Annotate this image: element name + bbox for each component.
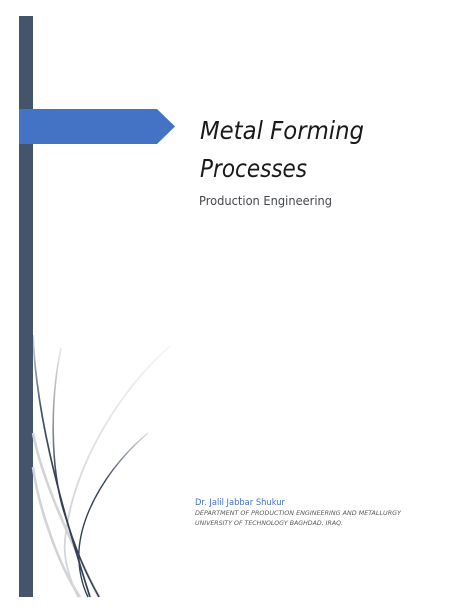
curve: dark left sweep xyxy=(33,335,90,597)
curve: grey thin sweep xyxy=(53,348,99,597)
left vertical bar xyxy=(19,16,33,597)
curve: light lower left xyxy=(33,467,80,597)
title line 2: Processes xyxy=(200,154,307,183)
curve: light long sweep xyxy=(65,346,170,597)
blue pentagon arrow xyxy=(19,109,175,144)
university line: UNIVERSITY OF TECHNOLOGY BAGHDAD, IRAQ. xyxy=(195,519,343,527)
department line: DEPARTMENT OF PRODUCTION ENGINEERING AND METALLURGY xyxy=(195,509,402,517)
author name: Dr. Jalil Jabbar Shukur xyxy=(195,498,285,508)
curve: light middle left xyxy=(33,433,99,597)
subtitle: Production Engineering xyxy=(199,193,332,208)
decorative curves xyxy=(33,335,170,597)
curve: dark right sweep xyxy=(79,433,148,597)
title line 1: Metal Forming xyxy=(200,116,364,145)
